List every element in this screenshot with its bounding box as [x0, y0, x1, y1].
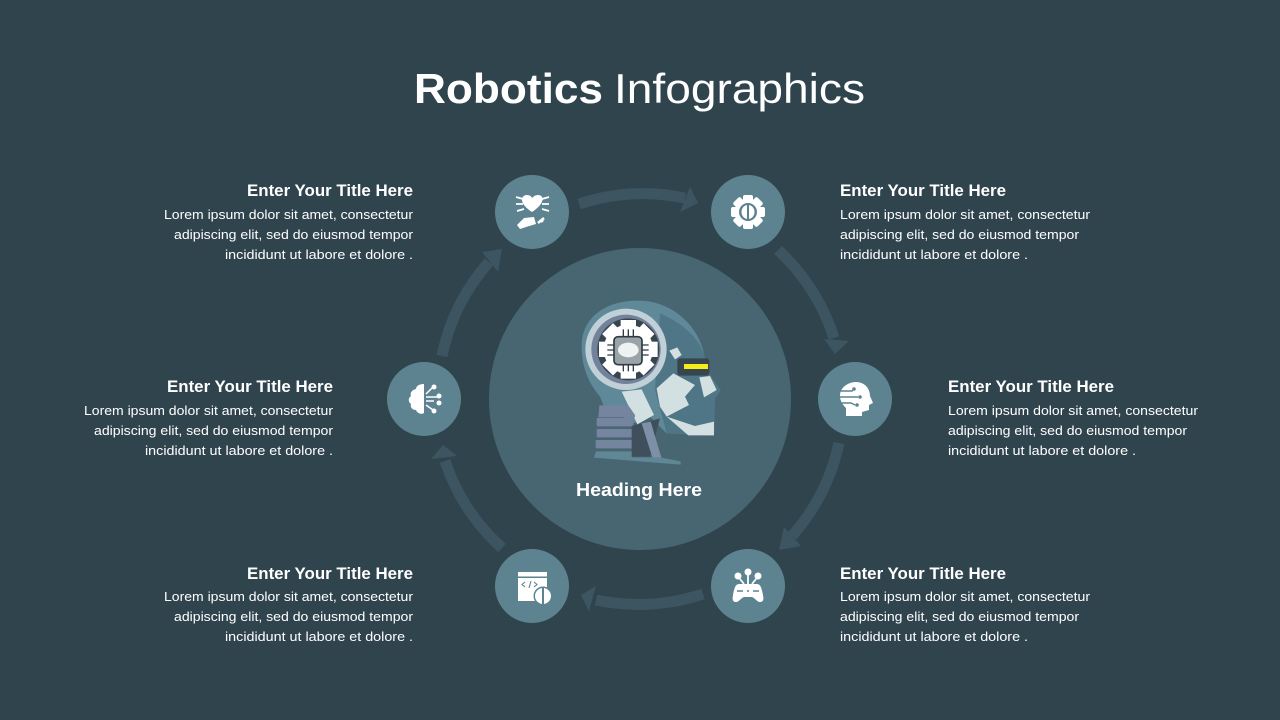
- text block: top right: Lorem ipsum dolor sit amet, consectetur: [840, 207, 1091, 222]
- text block: middle right: Lorem ipsum dolor sit amet, consectetur: [948, 403, 1199, 418]
- icon: gear: [731, 195, 765, 229]
- icon: circuit head: [840, 382, 873, 416]
- center heading: Heading Here: [576, 479, 702, 500]
- title: Infographics: [614, 65, 865, 112]
- gear: [599, 320, 658, 379]
- icon: brain circuit: [409, 384, 442, 414]
- text block: bottom right: incididunt ut labore et dolore .: [840, 629, 1028, 644]
- text block: middle left: incididunt ut labore et dolore .: [145, 443, 333, 458]
- text block: top right: [840, 182, 1091, 262]
- title: Robotics: [414, 65, 603, 112]
- arrow: step 2 to step 3: [778, 250, 849, 354]
- text block: top left: [164, 182, 414, 262]
- node 5: code window: [495, 549, 569, 623]
- center circle: [489, 248, 791, 550]
- node 2: gear with brain: [711, 175, 785, 249]
- node 6: brain circuit: [387, 362, 461, 436]
- text block: bottom right: adipiscing elit, sed do eiusmod tempor: [840, 609, 1080, 624]
- gear disc: [585, 309, 667, 390]
- text block: middle left: Enter Your Title Here: [167, 378, 333, 396]
- node 3: head with circuits: [818, 362, 892, 436]
- text block: middle right: Enter Your Title Here: [948, 378, 1114, 396]
- text block: middle left: [84, 378, 334, 458]
- title: [414, 65, 865, 112]
- text block: top left: Lorem ipsum dolor sit amet, consectetur: [164, 207, 414, 222]
- text block: bottom right: [840, 565, 1091, 644]
- text block: bottom right: Enter Your Title Here: [840, 565, 1006, 583]
- text block: top left: Enter Your Title Here: [247, 182, 413, 200]
- text block: bottom left: [164, 565, 414, 644]
- text block: top right: incididunt ut labore et dolore .: [840, 247, 1028, 262]
- node 4: game controller: [711, 549, 785, 623]
- eye visor: [677, 358, 709, 376]
- arrow: step 5 to step 6: [431, 445, 502, 548]
- icon: code window and brain: [518, 572, 552, 606]
- text block: middle right: incididunt ut labore et dolore .: [948, 443, 1136, 458]
- face plates: [657, 373, 695, 417]
- text block: bottom left: Enter Your Title Here: [247, 565, 413, 583]
- icon: heart and hand: [516, 195, 549, 229]
- arrow: step 4 to step 5: [581, 586, 703, 611]
- chip with brain: [607, 329, 649, 371]
- head shell: [582, 301, 721, 435]
- text block: middle left: adipiscing elit, sed do eiusmod tempor: [94, 423, 334, 438]
- robot head illustration: [582, 301, 721, 465]
- text block: bottom left: incididunt ut labore et dolore .: [225, 629, 413, 644]
- text block: top right: Enter Your Title Here: [840, 182, 1006, 200]
- arrow: step 6 to step 1: [442, 249, 502, 356]
- text block: middle right: [948, 378, 1199, 458]
- text block: top right: adipiscing elit, sed do eiusmod tempor: [840, 227, 1080, 242]
- text block: top left: incididunt ut labore et dolore .: [225, 247, 413, 262]
- text block: bottom left: Lorem ipsum dolor sit amet, consectetur: [164, 589, 414, 604]
- neck rings: [596, 405, 635, 448]
- node 1: heart and robot hand: [495, 175, 569, 249]
- arrow: step 1 to step 2: [579, 187, 698, 212]
- arrow: step 3 to step 4: [779, 443, 839, 550]
- text block: top left: adipiscing elit, sed do eiusmod tempor: [174, 227, 414, 242]
- text block: middle right: adipiscing elit, sed do eiusmod tempor: [948, 423, 1188, 438]
- neck column: [632, 418, 660, 457]
- icon: controller: [733, 568, 763, 602]
- text block: bottom right: Lorem ipsum dolor sit amet, consectetur: [840, 589, 1091, 604]
- text block: bottom left: adipiscing elit, sed do eiusmod tempor: [174, 609, 414, 624]
- base: [594, 451, 681, 465]
- cycle arrows: [431, 187, 849, 611]
- text block: middle left: Lorem ipsum dolor sit amet, consectetur: [84, 403, 334, 418]
